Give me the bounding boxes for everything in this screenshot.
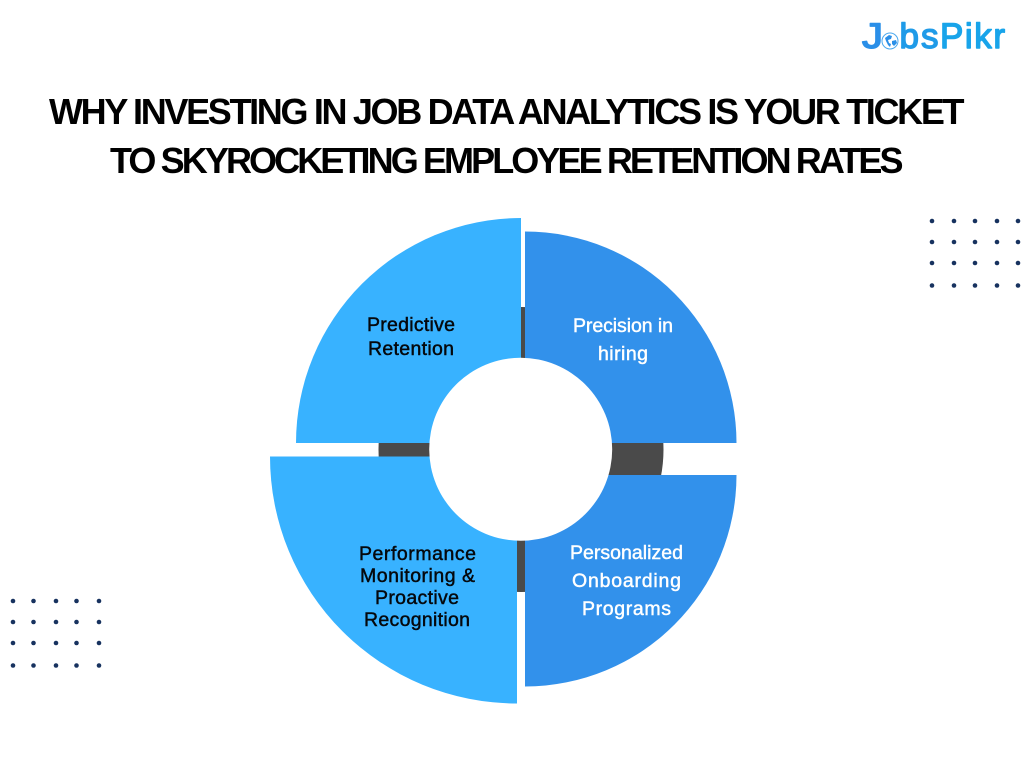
label: Precision in hiring: Precision in [573, 315, 673, 337]
logo: JobsPikr: J [862, 17, 883, 56]
label: Predictive Retention: Retention [368, 338, 454, 360]
gray base ring [378, 307, 664, 592]
logo: JobsPikr [862, 17, 1005, 56]
label: Personalized Onboarding Programs: Onboarding [572, 570, 681, 592]
icon: globe in logo [882, 33, 898, 49]
dot grid: top right [930, 219, 1020, 288]
label: Personalized Onboarding Programs [570, 542, 683, 620]
label: Performance Monitoring and Proactive Recognition [359, 543, 476, 631]
label: Predictive Retention: Predictive [367, 314, 455, 336]
segment: Precision in hiring [525, 232, 736, 443]
label: Performance Monitoring and Proactive Recognition: Monitoring & [360, 565, 475, 587]
center hole [429, 358, 612, 541]
segment: Predictive Retention [296, 218, 521, 443]
donut chart [270, 218, 736, 704]
label: Performance Monitoring and Proactive Recognition: Proactive [375, 587, 459, 609]
label: Performance Monitoring and Proactive Recognition: Recognition [364, 609, 470, 631]
segment: Performance Monitoring and Proactive Recognition [270, 456, 517, 704]
label: Precision in hiring [573, 315, 673, 365]
segment: Personalized Onboarding Programs [525, 475, 736, 686]
title: WHY INVESTING IN JOB DATA ANALYTICS IS YOUR TICKET [49, 91, 964, 132]
label: Performance Monitoring and Proactive Recognition: Performance [359, 543, 476, 565]
logo: JobsPikr: Pikr [940, 17, 1005, 56]
label: Personalized Onboarding Programs: Personalized [570, 542, 683, 564]
dot grid: bottom left [11, 599, 101, 668]
label: Personalized Onboarding Programs: Programs [582, 598, 671, 620]
logo: JobsPikr: bs [900, 17, 938, 56]
label: Precision in hiring: hiring [598, 343, 648, 365]
title: TO SKYROCKETING EMPLOYEE RETENTION RATES [110, 140, 904, 181]
title [49, 91, 964, 181]
label: Predictive Retention [367, 314, 455, 360]
